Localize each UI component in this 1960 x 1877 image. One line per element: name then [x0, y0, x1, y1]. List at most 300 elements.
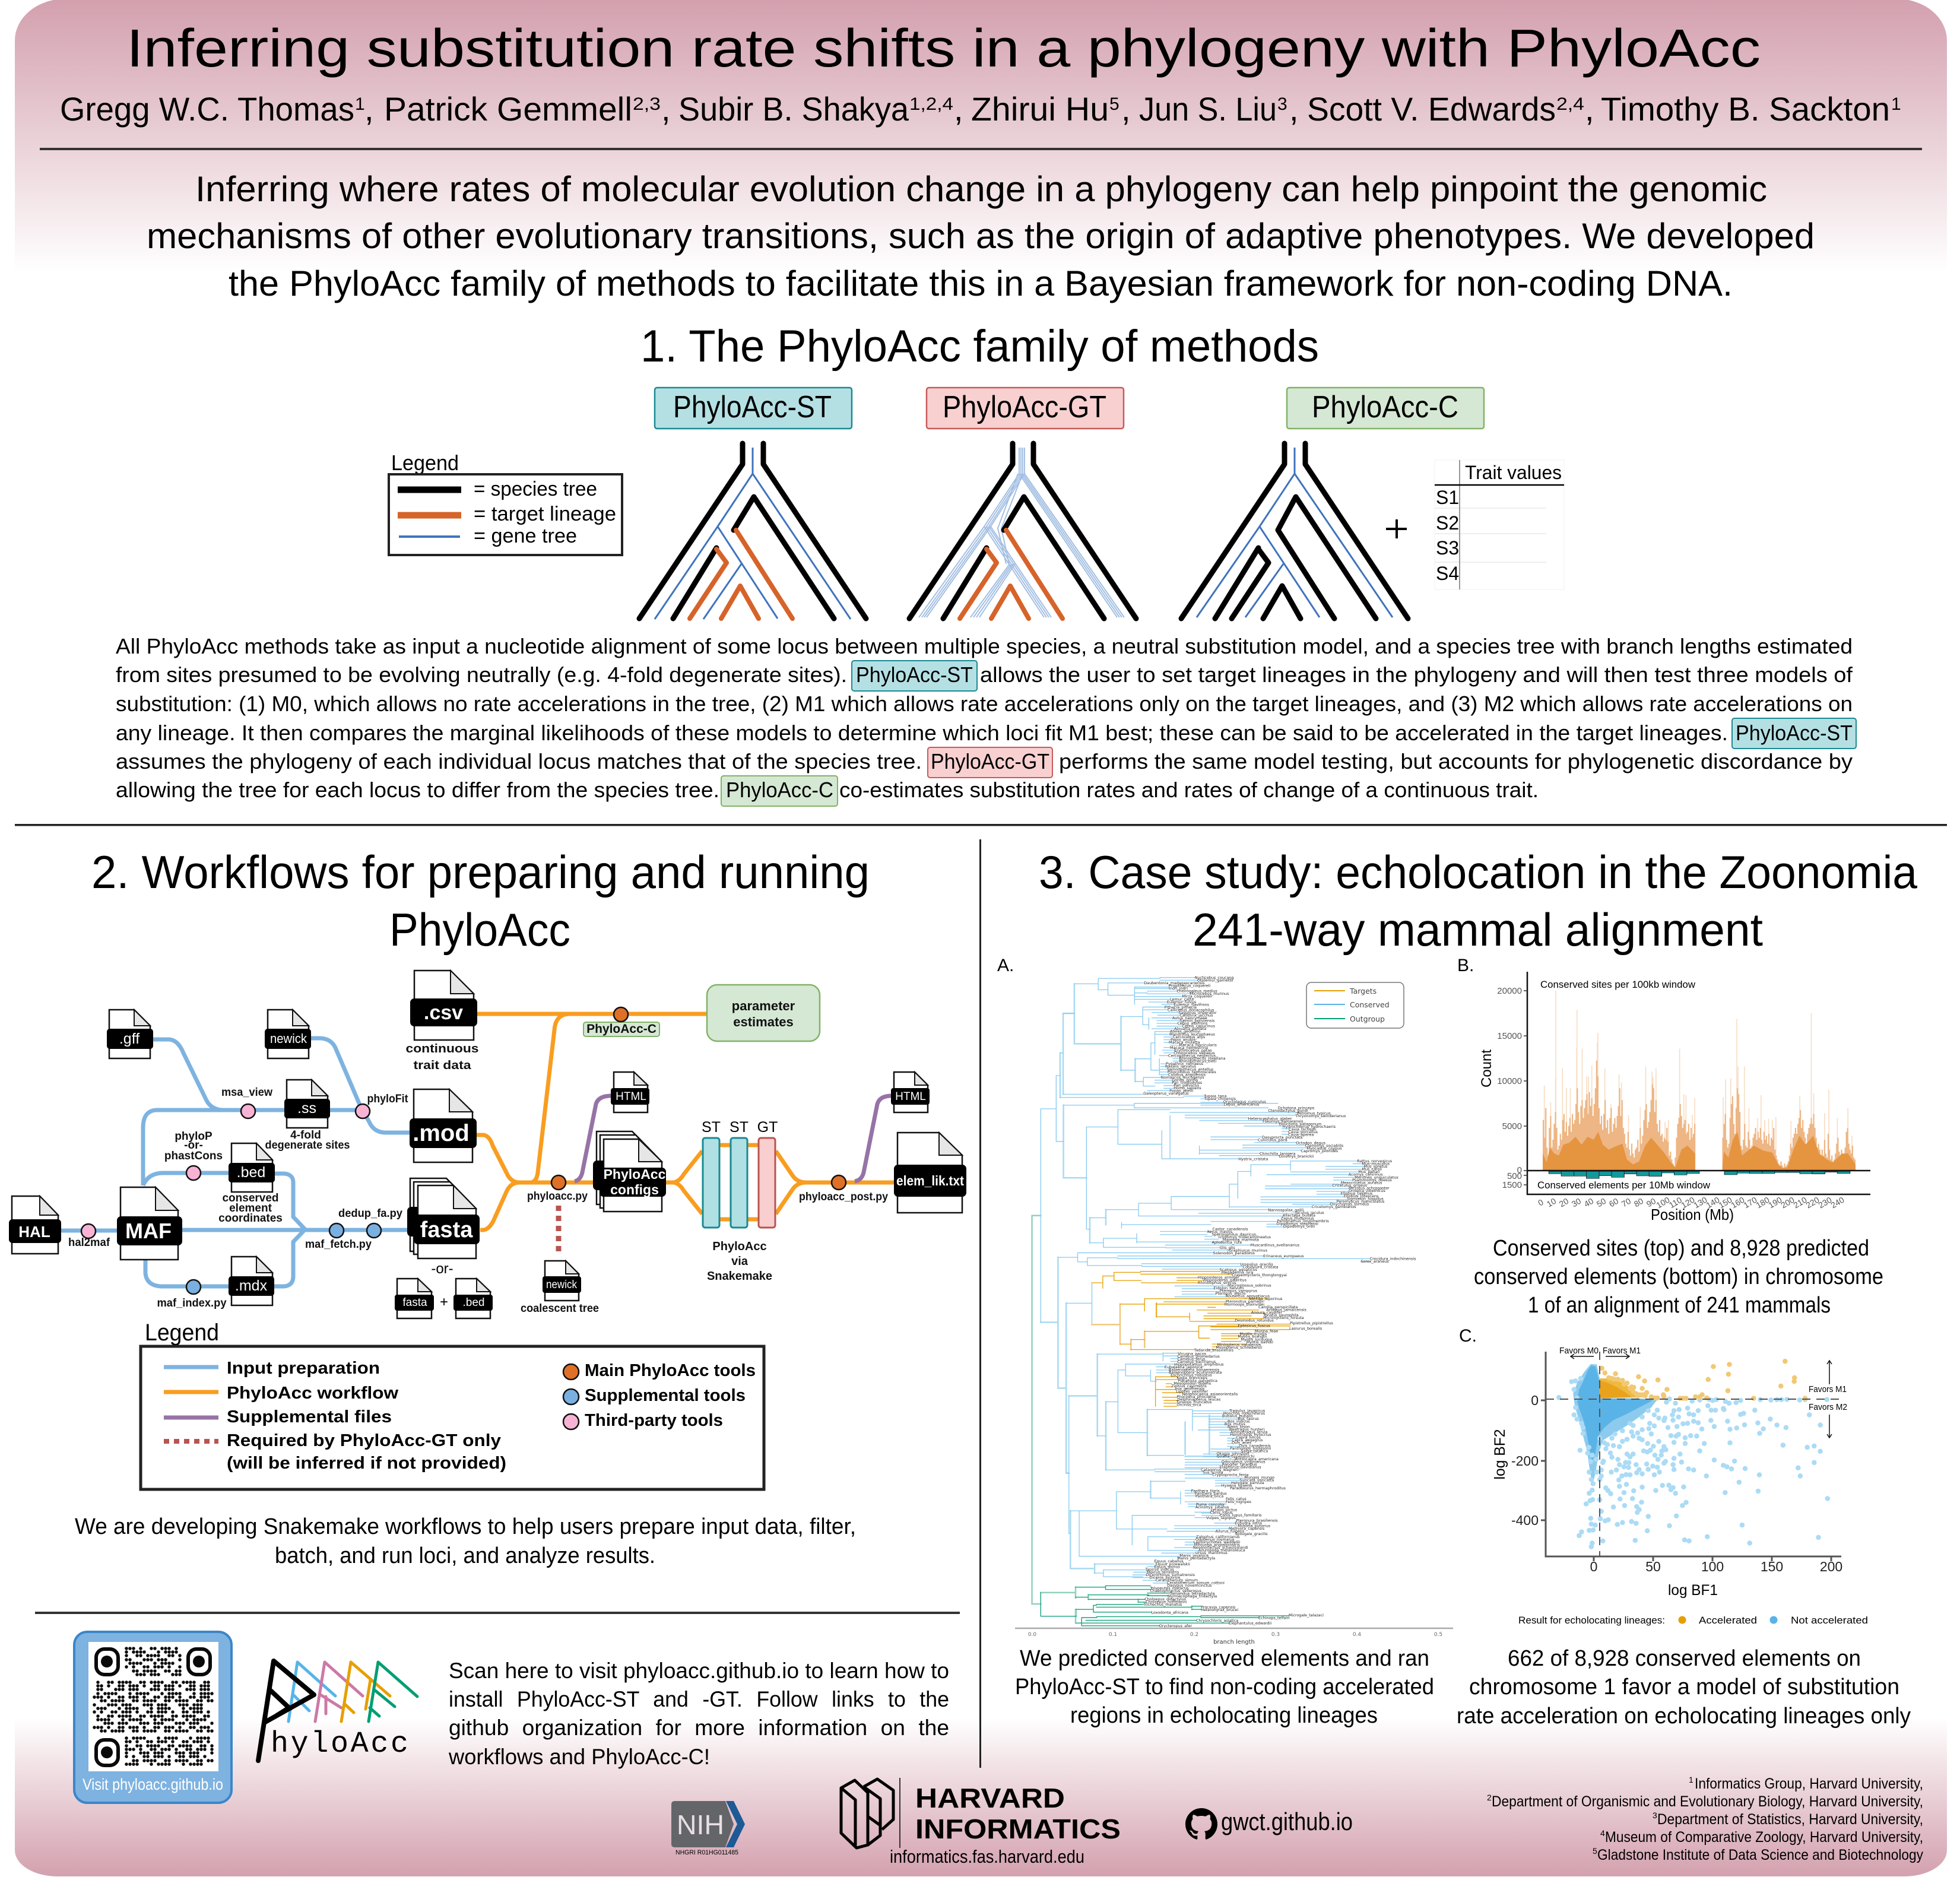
- panel B: axes: 10000: [1497, 1076, 1522, 1086]
- file: elem_lik: [894, 1133, 966, 1213]
- panel A: tip labels: Mirounga_angustirostris: [1194, 1542, 1240, 1547]
- panel C: legend: Accelerated: [1699, 1615, 1757, 1626]
- caption: panel C: rate acceleration on echolocating lineages only: [1457, 1704, 1911, 1729]
- panel A: tip labels: Cricetulus_griseus: [1332, 1183, 1368, 1188]
- panel A: tip labels: Myotis_davidii: [1247, 1340, 1273, 1345]
- panel A: tip labels: Erinaceus_europaeus: [1263, 1254, 1304, 1258]
- panel A: tip labels: Marmota_marmota: [1223, 1238, 1259, 1242]
- panel A: tip labels: Hemitragus_hylocrius: [1230, 1432, 1271, 1437]
- panel B: axes: 130: [1692, 1195, 1709, 1210]
- panel A: tip labels: Ceratotherium_simum: [1156, 1578, 1198, 1583]
- authors: Scott V. Edwards: [1307, 90, 1556, 128]
- logo: PhyloAcc: [258, 1661, 417, 1761]
- panel A: tip labels: Camelus_ferus: [1177, 1356, 1206, 1361]
- label: panel C: C.: [1459, 1326, 1477, 1346]
- panel A: tip labels: [1143, 975, 1416, 1628]
- badge: PhyloAcc-ST: PhyloAcc-ST: [673, 390, 832, 424]
- panel A: tip labels: Mus_caroli: [1362, 1167, 1382, 1172]
- logo: NIH: NIH: [677, 1809, 724, 1840]
- affiliations: 3: [1653, 1811, 1657, 1820]
- file: small fasta: fasta: [402, 1296, 427, 1309]
- panel A: phylogeny branches: [1032, 978, 1370, 1626]
- panel A: tip labels: Kogia_breviceps: [1176, 1375, 1208, 1380]
- label: continuous trait data: [406, 1042, 478, 1072]
- orange workflow lines: [477, 1014, 894, 1230]
- not accelerated points: [1559, 1378, 1828, 1547]
- tree: PhyloAcc-GT: [909, 443, 1136, 619]
- panel B: axes: 10: [1545, 1196, 1558, 1209]
- panel A: tip labels: Allactaga_bullata: [1283, 1213, 1315, 1218]
- panel A: tip labels: Myotis_brandtii: [1238, 1334, 1267, 1339]
- panel A: tip labels: Micronycteris_hirsuta: [1263, 1315, 1304, 1320]
- panel A: tip labels: Fukomys_damarensis: [1263, 1119, 1304, 1124]
- panel B: conserved elements bars: [1549, 1171, 1850, 1178]
- legend: tree key: = target lineage: [474, 503, 616, 525]
- dotted newick link: [556, 1206, 562, 1256]
- panel A: tip labels: Nycticebus_coucang: [1195, 975, 1234, 980]
- panel A: tip labels: Noctilio_leporinus: [1249, 1296, 1283, 1301]
- file: bed: .bed: [237, 1164, 265, 1181]
- introduction: Inferring where rates of molecular evolution change in a phylogeny can help pinpoint the genomic: [195, 169, 1767, 209]
- box: parameter estimates: [707, 985, 820, 1041]
- affiliations: 1: [1689, 1775, 1693, 1784]
- panel A: tip labels: Thryonomys_swinderianus: [1295, 1114, 1346, 1118]
- file: mdx: .mdx: [235, 1277, 268, 1294]
- heading: section 3: 241-way mammal alignment: [1193, 903, 1763, 956]
- panel A: tip labels: Graphiurus_murinus: [1229, 1248, 1268, 1253]
- panel A: tip labels: Orycteropus_afer: [1159, 1624, 1192, 1628]
- mid density spikes: [1543, 1061, 1695, 1171]
- introduction: the PhyloAcc family of methods to facilitate this in a Bayesian framework for non-coding DNA.: [229, 264, 1733, 303]
- panel A: tip labels: Felis_nigripes: [1226, 1499, 1252, 1504]
- blue input preparation lines: [61, 1038, 414, 1286]
- label: PhyloAcc via Snakemake: Snakemake: [707, 1270, 772, 1283]
- table: trait values: [1435, 460, 1564, 589]
- panel B: axes: 230: [1816, 1195, 1834, 1210]
- panel B: axes: Conserved elements per 10Mb window: [1537, 1180, 1711, 1191]
- panel A: tip labels: Canis_lupus: [1210, 1510, 1233, 1515]
- panel A: tip labels: Ailurus_fulgens: [1216, 1529, 1245, 1534]
- introduction: [147, 169, 1815, 303]
- panel A: tip labels: Mirza_coquereli: [1182, 994, 1212, 999]
- text block: description of methods: PhyloAcc-C: [726, 778, 833, 802]
- panel A: tip labels: Zapus_hudsonius: [1281, 1216, 1314, 1220]
- panel A: tip labels: Platanista_gangetica: [1178, 1378, 1217, 1383]
- text block: description of methods: [116, 634, 1856, 806]
- caption: panel A: regions in echolocating lineages: [1070, 1703, 1378, 1728]
- panel A: tip labels: Psammomys_obesus: [1352, 1178, 1392, 1182]
- caption: panel B: [1474, 1236, 1883, 1318]
- panel A: tip labels: Pan_troglodytes: [1172, 1080, 1203, 1085]
- panel A: tip labels: Panthera_onca: [1195, 1494, 1223, 1499]
- legend: tree key: Legend: [391, 451, 459, 475]
- panel A: tip labels: Cryptoprocta_ferox: [1212, 1472, 1249, 1477]
- label: PhyloAcc via Snakemake: PhyloAcc: [712, 1240, 767, 1253]
- file: ss: [284, 1080, 330, 1128]
- file: MAF: MAF: [125, 1219, 172, 1243]
- panel C: axes and annotations: Favors M1: [1603, 1346, 1641, 1356]
- file: coalescent newick: [543, 1261, 581, 1301]
- tool labels: [68, 1086, 888, 1310]
- label: or: -or-: [431, 1261, 453, 1277]
- panel A: tip labels: Dinomys_branickii: [1279, 1154, 1314, 1159]
- panel A: tip labels: Manis_javanica: [1179, 1553, 1209, 1558]
- authors: Patrick Gemmell: [384, 90, 632, 128]
- panel A: tip labels: Nannospalax_galili: [1268, 1208, 1304, 1213]
- panel A: branch length axis: 0.2: [1190, 1632, 1198, 1638]
- panel A: tip labels: Choloepus_didactylus: [1144, 1597, 1187, 1602]
- legend: workflow: Main PhyloAcc tools: [585, 1361, 756, 1380]
- panel B: axes: 200: [1779, 1195, 1796, 1210]
- panel A: tip labels: Loxodonta_africana: [1151, 1610, 1188, 1615]
- legend: workflow: PhyloAcc workflow: [227, 1384, 398, 1403]
- panel A: tree legend: Targets: [1349, 987, 1377, 995]
- panel A: tip labels: Mesoplodon_bidens: [1174, 1381, 1211, 1385]
- panel A: tip labels: Mesocricetus_auratus: [1341, 1180, 1382, 1185]
- text: workflow note: We are developing Snakemake workflows to help users prepare input data, filter,: [75, 1514, 856, 1539]
- panel A: tip labels: Moschus_moschiferus: [1223, 1411, 1266, 1416]
- panel B: axes: 150: [1717, 1195, 1734, 1210]
- panel A: tip labels: Hipposideros_armiger: [1198, 1275, 1239, 1280]
- authors: ,: [364, 90, 374, 128]
- panel A: tip labels: Acinonyx_jubatus: [1195, 1505, 1229, 1510]
- text block: description of methods: any lineage. It then compares the marginal likelihoods of these models to determine which loci fit M1 best; these can be said to be accelerated in the target lineages.: [116, 721, 1728, 745]
- panel A: tip labels: Delphinapterus_leucas: [1177, 1397, 1221, 1402]
- conserved branches, deep: [1041, 978, 1278, 1323]
- panel A: tip labels: Chaetophractus_vellerosus: [1150, 1589, 1202, 1593]
- plus: +: [440, 1294, 448, 1310]
- panel A: tip labels: Otolemur_garnettii: [1197, 978, 1233, 982]
- panel A: tip labels: Tadarida_brasiliensis: [1194, 1347, 1234, 1352]
- panel A: tip labels: Crocidura_indochinensis: [1370, 1257, 1416, 1261]
- panel A: tip labels: Pongo_abelii: [1169, 1089, 1193, 1093]
- panel A: tip labels: Ctenodactylus_gundi: [1268, 1108, 1308, 1113]
- QR card: [74, 1632, 231, 1803]
- panel A: tip labels: Pan_paniscus: [1174, 1083, 1200, 1088]
- panel A: tip labels: Macroglossus_sobrinus: [1228, 1283, 1271, 1288]
- panel A: tip labels: Bos_indicus: [1228, 1419, 1250, 1423]
- tool labels: dedup_fa.py: [338, 1207, 402, 1220]
- affiliations: 2: [1487, 1793, 1492, 1802]
- panel B: axes: 1500: [1502, 1180, 1522, 1190]
- authors: Jun S. Liu: [1139, 90, 1277, 128]
- panel A: tip labels: Indri_indri: [1169, 986, 1188, 991]
- panel A: tip labels: Pteronotus_parnellii: [1226, 1299, 1264, 1304]
- text block: description of methods: assumes the phylogeny of each individual locus matches that of the species tree.: [116, 749, 922, 773]
- panel B: axes: 160: [1729, 1195, 1746, 1210]
- panel A: tip labels: Equus_caballus: [1155, 1559, 1184, 1564]
- panel A: tip labels: Microgale_talazaci: [1289, 1613, 1324, 1618]
- caption: panel B: Conserved sites (top) and 8,928 predicted: [1493, 1236, 1869, 1261]
- panel B: dense site counts: [1543, 1132, 1856, 1178]
- panel A: tip labels: Beatragus_hunteri: [1229, 1427, 1264, 1432]
- panel A: tip labels: Hyaena_hyaena: [1222, 1483, 1252, 1488]
- panel B: axes: 15000: [1497, 1031, 1522, 1041]
- file: newick input: newick: [270, 1031, 307, 1046]
- authors: 3: [1277, 94, 1287, 114]
- panel B: axes: 210: [1791, 1195, 1809, 1210]
- text: scan instructions: github organization for more information on the: [449, 1716, 949, 1740]
- caption: panel C: 662 of 8,928 conserved elements on: [1508, 1646, 1861, 1671]
- accelerated cloud: [1600, 1378, 1645, 1399]
- panel A: tip labels: Suricata_suricatta: [1239, 1477, 1274, 1482]
- panel A: tip labels: Mungos_mungo: [1245, 1475, 1274, 1480]
- text: scan instructions: install PhyloAcc-ST and -GT. Follow links to the: [449, 1687, 949, 1711]
- text: workflow note: [75, 1514, 856, 1568]
- panel A: tip labels: Meriones_unguiculatus: [1355, 1175, 1398, 1180]
- panel A: tip labels: Nasalis_larvatus: [1165, 1064, 1197, 1069]
- panel A: tip labels: Helogale_parvula: [1231, 1480, 1264, 1485]
- panel A: tip labels: Equus_przewalskii: [1156, 1562, 1190, 1567]
- affiliations: Museum of Comparative Zoology, Harvard University,: [1605, 1829, 1923, 1846]
- panel A: tip labels: Cavia_porcellus: [1288, 1130, 1318, 1134]
- panel A: tip labels: Tapirus_terrestris: [1146, 1570, 1179, 1574]
- text block: description of methods: PhyloAcc-ST: [856, 662, 973, 687]
- panel A: tip labels: Aotus_nancymaae: [1172, 1016, 1207, 1020]
- introduction: mechanisms of other evolutionary transitions, such as the origin of adaptive phenotypes. We developed: [147, 216, 1815, 256]
- panel A: tip labels: Heterohyrax_brucei: [1201, 1608, 1238, 1612]
- panel A: tip labels: Callicebus_donacophilus: [1168, 1007, 1214, 1012]
- panel A: tip labels: Procavia_capensis: [1201, 1605, 1236, 1609]
- label: continuous trait data: continuous: [406, 1042, 478, 1055]
- panel A: tip labels: Eulemur_flavifrons: [1174, 1002, 1209, 1007]
- panel A: tip labels: Erythrocebus_patas: [1174, 1048, 1212, 1053]
- panel B: axes: 60: [1607, 1196, 1620, 1209]
- legend: tree key: = gene tree: [474, 525, 577, 547]
- file: small fasta: [395, 1279, 434, 1318]
- QR finder patterns: [96, 1649, 210, 1765]
- table: trait values: Trait values: [1465, 462, 1562, 483]
- text: scan instructions: Scan here to visit phyloacc.github.io to learn how to: [449, 1659, 949, 1683]
- panel A: tip labels: Camelus_dromedarius: [1177, 1354, 1220, 1359]
- file: HAL: [9, 1196, 61, 1254]
- label: continuous trait data: trait data: [413, 1059, 472, 1072]
- panel A: tip labels: Panthera_tigris: [1191, 1489, 1220, 1494]
- panel A: branch length axis: 0.0: [1028, 1632, 1036, 1638]
- panel A: tip labels: Rousettus_aegyptiacus: [1226, 1294, 1270, 1299]
- panel A: tip labels: Neophocaena_asiaeorientalis: [1182, 1391, 1238, 1396]
- tool labels: phyloFit: [367, 1093, 408, 1105]
- panel C: axes and annotations: log BF2: [1492, 1429, 1508, 1479]
- panel A: tip labels: Ziphius_cavirostris: [1171, 1384, 1207, 1388]
- panel A: tip labels: Lycaon_pictus: [1210, 1507, 1238, 1512]
- panel A: tip labels: Zalophus_californianus: [1196, 1534, 1240, 1539]
- authors: 2,3: [633, 94, 661, 114]
- affiliations: Gladstone Institute of Data Science and Biotechnology: [1597, 1847, 1923, 1863]
- panel A: tip labels: Hystrix_cristata: [1238, 1157, 1268, 1162]
- panel A: tip labels: Enhydra_lutris: [1235, 1521, 1263, 1526]
- panel A: tip labels: Lemur_catta: [1170, 997, 1194, 1001]
- panel B: axes: 190: [1766, 1195, 1784, 1210]
- text: scan instructions: [448, 1659, 949, 1769]
- legend: workflow: Input preparation: [227, 1359, 380, 1378]
- panel A: tip labels: Saguinus_imperator: [1178, 1010, 1217, 1015]
- QR code pattern: [94, 1648, 213, 1764]
- panel A: tip labels: Paradoxurus_hermaphroditus: [1230, 1486, 1286, 1491]
- panel A: tip labels: Petromus_typicus: [1297, 1111, 1331, 1115]
- box: parameter estimates: parameter: [732, 998, 795, 1013]
- label: 4-fold degenerate sites: degenerate sites: [265, 1139, 350, 1152]
- affiliations: 4: [1600, 1828, 1605, 1838]
- panel A: tip labels: Eubalaena_japonica: [1165, 1365, 1203, 1369]
- text block: description of methods: allows the user to set target lineages in the phylogeny and will then test three models of: [980, 662, 1853, 687]
- file: mod: .mod: [413, 1120, 470, 1146]
- file: coalescent newick: newick: [546, 1279, 577, 1291]
- caption: panel C: chromosome 1 favor a model of substitution: [1469, 1675, 1899, 1700]
- panel A: tip labels: Bos_taurus: [1238, 1416, 1259, 1421]
- label: coalescent tree: coalescent tree: [521, 1302, 599, 1315]
- panel A: tip labels: Anoura_caudifer: [1251, 1310, 1283, 1315]
- caption: panel A: We predicted conserved elements and ran: [1020, 1646, 1429, 1671]
- table: trait values: S1: [1436, 487, 1459, 508]
- panel A: branch length axis: 0.5: [1434, 1632, 1442, 1638]
- panel A: tip labels: Odobenus_rosmarus: [1195, 1537, 1235, 1542]
- legend: workflow: Required by PhyloAcc-GT only: [227, 1431, 501, 1450]
- panel A: tip labels: Tursiops_truncatus: [1175, 1400, 1212, 1404]
- panel A: tip labels: Oryctolagus_cuniculus: [1223, 1099, 1266, 1104]
- panel C: scatter plot points: [1559, 1361, 1828, 1547]
- panel A: tip labels: Spilogale_gracilis: [1235, 1532, 1268, 1536]
- heading: section 3: 3. Case study: echolocation in the Zoonomia: [1039, 846, 1918, 898]
- label: phyloP or phastCons: phyloP: [175, 1130, 213, 1143]
- text block: description of methods: PhyloAcc-ST: [1736, 721, 1853, 745]
- tool nodes: [81, 1007, 846, 1294]
- heading: section 3: [1039, 846, 1918, 956]
- panel A: tip labels: Rhinopithecus_roxellana: [1179, 1056, 1225, 1061]
- panel A: tip labels: Camelus_bactrianus: [1177, 1359, 1216, 1364]
- panel A: tip labels: Pipistrellus_pipistrellus: [1290, 1321, 1333, 1326]
- panel A: tip labels: Eptesicus_fuscus: [1238, 1324, 1270, 1329]
- file: small bed: .bed: [463, 1296, 484, 1309]
- file stack: PhyloAcc configs: configs: [610, 1182, 659, 1197]
- panel A: tip labels: Glis_glis: [1220, 1245, 1235, 1250]
- panel A: tip labels: Cavia_aperea: [1288, 1133, 1314, 1137]
- box: parameter estimates: estimates: [733, 1014, 794, 1029]
- panel A: tip labels: Onychomys_torridus: [1330, 1202, 1369, 1207]
- panel A: tip labels: Pteronura_brasiliensis: [1236, 1518, 1278, 1523]
- panel C: axes and annotations: Favors M2: [1809, 1402, 1847, 1412]
- panel B: axes: 180: [1754, 1195, 1771, 1210]
- panel A: tip labels: Rangifer_tarandus: [1222, 1462, 1257, 1467]
- panel B: axes: 40: [1582, 1196, 1595, 1209]
- panel B: axes: 220: [1804, 1195, 1821, 1210]
- panel C: axes and annotations: log BF1: [1668, 1582, 1718, 1599]
- panel A: tip labels: Propithecus_coquereli: [1169, 984, 1210, 988]
- legend: tree key: [389, 451, 622, 555]
- panel A: tip labels: Homo_sapiens: [1174, 1086, 1201, 1090]
- panel A: tip labels: Lipotes_vexillifer: [1176, 1389, 1208, 1394]
- snakemake model bars: [702, 1119, 778, 1228]
- panel A: tip labels: Panthera_pardus: [1195, 1491, 1227, 1496]
- tree: PhyloAcc-C: [1181, 443, 1408, 619]
- authors: 1,2,4: [909, 94, 953, 114]
- logo: NIH: [671, 1801, 745, 1856]
- authors: ,: [661, 90, 671, 128]
- panel A: tip labels: Dolichotis_patagonum: [1279, 1121, 1321, 1126]
- heading: section 1: 1. The PhyloAcc family of methods: [640, 321, 1319, 372]
- label: conserved element coordinates: coordinates: [218, 1212, 283, 1225]
- panel A: tip labels: Solenodon_paradoxus: [1213, 1251, 1255, 1255]
- tree: PhyloAcc-ST: [639, 443, 866, 619]
- panel B: axes: 110: [1667, 1195, 1683, 1210]
- affiliations: Department of Statistics, Harvard University,: [1657, 1811, 1923, 1828]
- file: csv: [410, 971, 477, 1040]
- panel C: axes and annotations: 0: [1590, 1559, 1597, 1574]
- panel C: axes and annotations: -400: [1511, 1513, 1539, 1528]
- panel A: tip labels: Dasypus_novemcinctus: [1167, 1583, 1212, 1588]
- panel A: tip labels: Cheirogaleus_medius: [1176, 989, 1217, 994]
- panel C: axes and annotations: 0: [1531, 1393, 1539, 1408]
- panel B: axes: Conserved sites per 100kb window: [1540, 979, 1696, 990]
- panel B: conserved sites histogram: [1543, 991, 1855, 1171]
- panel C: axes and annotations: -200: [1511, 1453, 1539, 1469]
- panel A: tip labels: Papio_anubis: [1171, 1037, 1195, 1042]
- panel A: tip labels: Dicerorhinus_sumatrensis: [1146, 1572, 1195, 1577]
- label: panel A: A.: [997, 956, 1014, 975]
- panel A: tip labels: Cebus_albifrons: [1177, 1021, 1208, 1026]
- badge: PhyloAcc-C: PhyloAcc-C: [1312, 390, 1458, 424]
- panel C: axes and annotations: Favors M0: [1559, 1346, 1599, 1356]
- panel A: tip labels: Pteropus_alecto: [1216, 1291, 1246, 1296]
- panel A: tip labels: Ovis_aries: [1232, 1441, 1252, 1445]
- panel A: tip labels: Pantholops_hodgsonii: [1230, 1446, 1271, 1451]
- panel B: axes: 240: [1829, 1195, 1846, 1210]
- file: MAF: [117, 1187, 182, 1260]
- panel A: tip labels: Miniopterus_natalensis: [1217, 1342, 1261, 1347]
- panel A: tip labels: Eulemur_fulvus: [1167, 1000, 1197, 1004]
- panel A: tip labels: Nomascus_leucogenys: [1161, 1075, 1204, 1080]
- panel B: axes: 80: [1632, 1196, 1645, 1209]
- authors: Gregg W.C. Thomas: [60, 90, 354, 128]
- target branches: [1092, 1303, 1156, 1349]
- text block: description of methods: co-estimates substitution rates and rates of change of a continuous trait.: [839, 778, 1539, 802]
- file stack: fasta: fasta: [420, 1217, 473, 1242]
- panel A: tip labels: Capromys_pilorides: [1301, 1149, 1339, 1153]
- text block: description of methods: substitution: (1) M0, which allows no rate accelerations in the tree, (2) M1 which allows rate accelerations only on the target lineages, and (3) M2 which allows rate accelerations on: [116, 692, 1853, 716]
- legend: workflow: Supplemental tools: [585, 1386, 746, 1405]
- file: bed: [229, 1143, 275, 1192]
- panel A: tree legend: Outgroup: [1350, 1014, 1385, 1023]
- panel A: tip labels: Sigmodon_hispidus: [1347, 1197, 1384, 1201]
- panel A: tip labels: Microtus_ochrogaster: [1349, 1185, 1390, 1190]
- panel A: tip labels: Chrysochloris_asiatica: [1196, 1618, 1238, 1623]
- panel A: tip labels: Acomys_cahirinus: [1349, 1172, 1383, 1177]
- panel A: branch length axis: branch length: [1213, 1639, 1255, 1645]
- panel A: tip labels: Artibeus_jamaicensis: [1266, 1307, 1306, 1312]
- panel A: tip labels: Ateles_geoffroyi: [1170, 1029, 1201, 1034]
- panel A: tip labels: Mustela_putorius: [1238, 1524, 1271, 1529]
- title: Inferring substitution rate shifts in a phylogeny with PhyloAcc: [126, 19, 1761, 78]
- panel A: tip labels: Trichechus_manatus: [1143, 1602, 1182, 1607]
- caption: panel C: [1457, 1646, 1911, 1729]
- panel A: tip labels: Myocastor_coypus: [1307, 1146, 1342, 1150]
- panel A: tip labels: Pygathrix_nemaeus: [1166, 1061, 1204, 1066]
- panel A: tip labels: Bos_mutus: [1225, 1422, 1246, 1426]
- legend: tree key: = species tree: [474, 478, 597, 500]
- authors: ,: [1585, 90, 1594, 128]
- panel A: branch length axis: 0.1: [1109, 1632, 1117, 1638]
- panel A: tip labels: Cercopithecus_neglectus: [1168, 1054, 1216, 1058]
- panel A: tip labels: Macaca_nemestrina: [1170, 1045, 1208, 1050]
- panel A: tip labels: Okapia_johnstoni: [1217, 1451, 1249, 1456]
- panel A: tip labels: Capra_hircus: [1236, 1435, 1261, 1440]
- panel A: tip labels: Sorex_araneus: [1360, 1259, 1389, 1264]
- panel A: tip labels: Leptonychotes_weddellii: [1194, 1540, 1241, 1545]
- file: HAL: HAL: [18, 1223, 50, 1241]
- file: mod: [410, 1089, 477, 1162]
- panel A: tip labels: Mormoops_blainvillei: [1225, 1302, 1264, 1307]
- outgroup branches: [1032, 1216, 1192, 1623]
